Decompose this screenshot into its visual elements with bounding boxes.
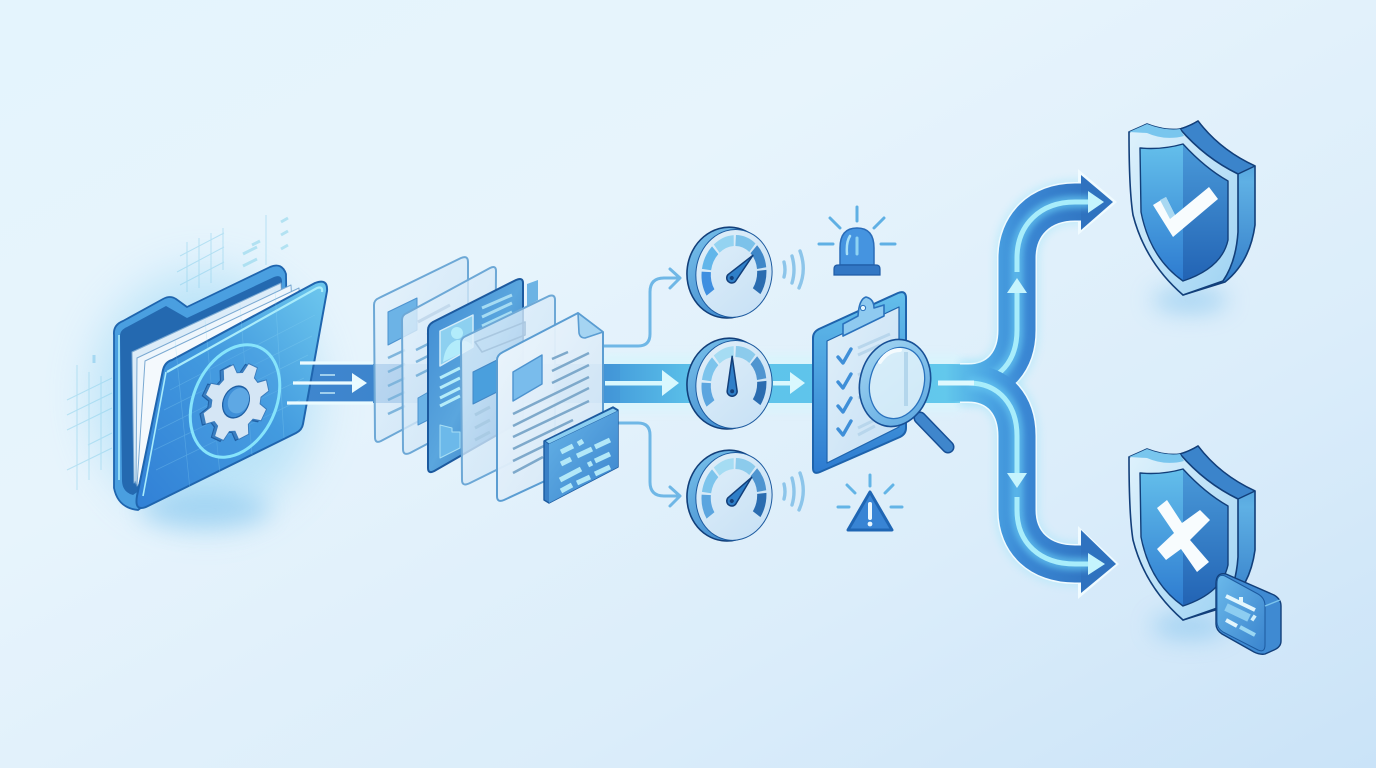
shield inner face [1140,469,1183,606]
folder front panel [136,282,327,508]
document layer 3 (dark) [428,279,538,472]
signal waves top [784,251,803,288]
magnifying glass [850,332,948,447]
cross mark [1157,500,1210,572]
shield side [1180,446,1255,620]
shield inner face [1140,144,1183,281]
gear icon [188,352,281,453]
check marks [838,349,851,435]
middle gauge [681,332,779,436]
upper branch arrow outline [960,169,1117,383]
document layer 5 (front) [497,313,603,501]
warning triangle icon [838,475,902,530]
clip [843,297,884,336]
decorative data grid [67,215,288,490]
shield rim [1129,449,1238,620]
upper branch fill [945,175,1113,383]
light line after magnifier [938,380,974,386]
alarm siren icon [819,207,895,275]
needle [725,252,757,285]
signal waves bottom [784,473,803,510]
band arrow after documents [605,370,679,396]
rejected shield [1129,446,1255,638]
needle [725,474,756,508]
lower branch arrow outline [960,383,1119,599]
lower branch fill [945,383,1116,593]
approved shield [1129,121,1255,312]
shield rim [1129,124,1238,295]
needle [727,356,737,396]
clipboard with checklist [813,292,906,473]
document layer 2 [402,267,496,454]
document stack [374,257,618,503]
document layer 1 [374,257,468,442]
small code card [544,407,618,503]
branch connector down [618,423,680,506]
document layer 4 [461,296,555,484]
top gauge [681,221,779,325]
gear ring [173,330,297,472]
folder icon [114,266,327,510]
bottom gauge [681,444,779,548]
main flow band [298,354,960,412]
clipboard board [813,292,906,473]
small report badge [1216,574,1281,654]
folder glow [93,273,317,528]
folder pages [132,283,302,486]
branch connector up [603,269,680,346]
arrows out of folder [287,363,373,403]
check mark [1153,187,1218,237]
shield side [1180,121,1255,295]
folder circuit grid [154,290,315,490]
clipboard paper [827,307,899,463]
band arrow after gauges [773,372,805,394]
folder back [114,266,288,510]
